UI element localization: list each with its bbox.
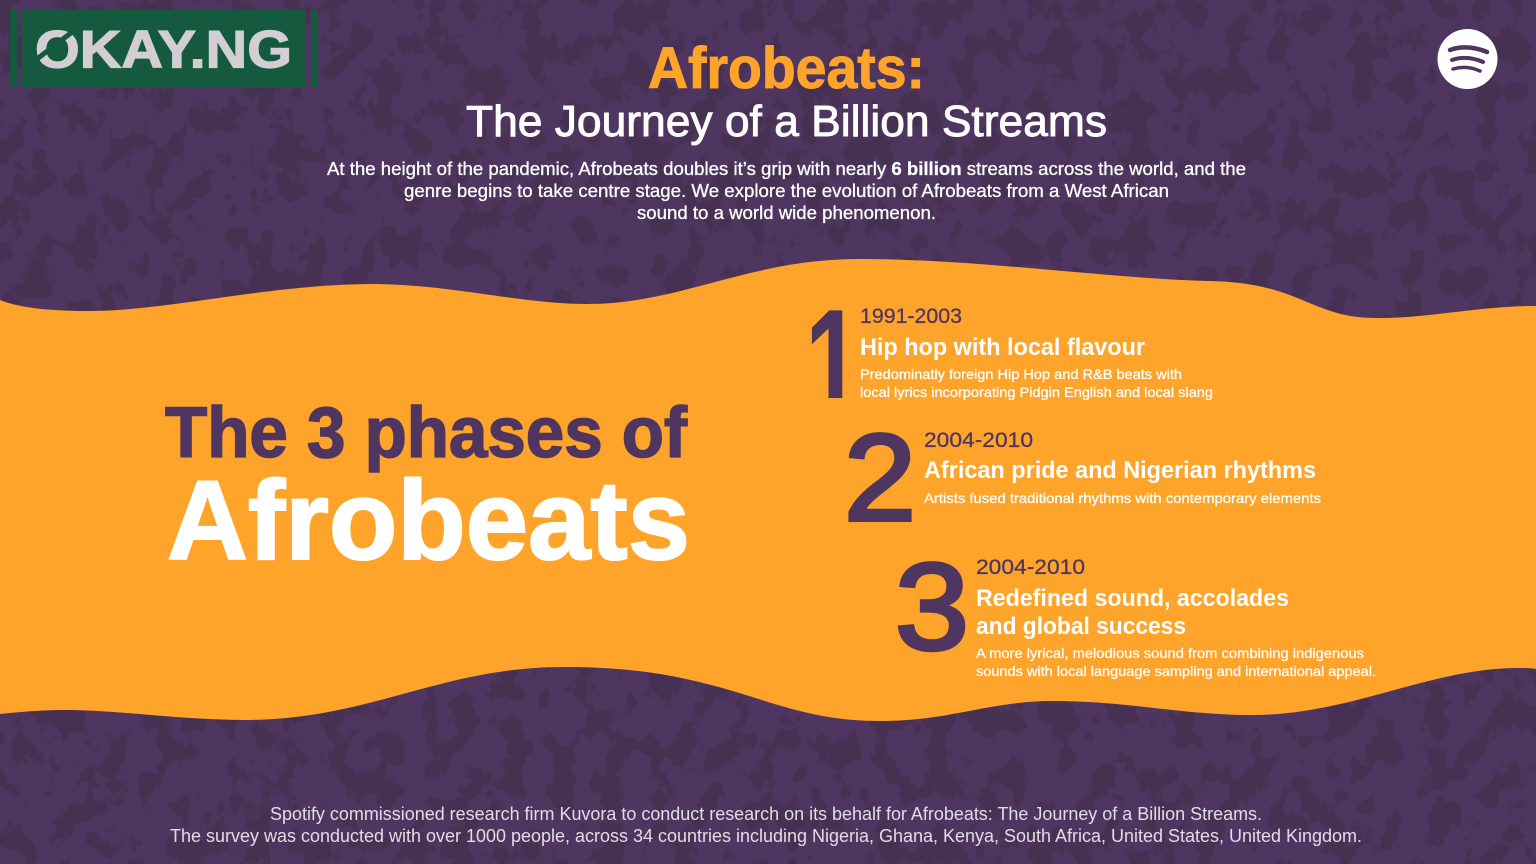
intro text: At the height of the pandemic, Afrobeats doubles it’s grip with nearly 6 billion streams across the world, and the — [327, 159, 1246, 179]
phase 3 description: sounds with local language sampling and international appeal. — [976, 663, 1376, 679]
phase 3 years: 2004-2010 — [976, 555, 1085, 579]
phase 1 — [812, 308, 1212, 400]
intro text: sound to a world wide phenomenon. — [637, 203, 936, 223]
phase 1 description: Predominatly foreign Hip Hop and R&B beats with — [860, 366, 1182, 382]
footer note — [170, 804, 1362, 846]
phase 1 description — [860, 366, 1213, 400]
logo: OKAY.NG: OKAY.NG — [35, 20, 292, 80]
number 3: 3 — [895, 539, 969, 676]
phase 3 heading: and global success — [976, 613, 1186, 640]
title: Afrobeats: — [648, 36, 925, 101]
phase 2 — [844, 410, 1321, 547]
logo: OKAY.NG — [10, 10, 317, 88]
icon: Spotify logo — [1438, 29, 1498, 89]
phase 3 heading: Redefined sound, accolades — [976, 585, 1289, 612]
title — [466, 36, 1107, 146]
phase 2 heading: African pride and Nigerian rhythms — [924, 457, 1316, 484]
heading: The 3 phases of Afrobeats: The 3 phases of — [165, 394, 687, 473]
footer note: The survey was conducted with over 1000 people, across 34 countries including Nigeria, Ghana, Kenya, South Africa, United States, United Kingdom. — [170, 826, 1362, 846]
phase 1 years: 1991-2003 — [860, 304, 962, 328]
heading: The 3 phases of Afrobeats: Afrobeats — [167, 458, 690, 583]
number 1: 1 — [805, 277, 861, 450]
number 2: 2 — [844, 410, 916, 547]
intro text — [327, 159, 1246, 223]
panel: orange wave band — [0, 259, 1536, 721]
phase 2 years: 2004-2010 — [924, 428, 1033, 452]
heading: The 3 phases of Afrobeats — [165, 394, 690, 583]
phase 3 heading — [976, 585, 1289, 640]
phase 2 description: Artists fused traditional rhythms with contemporary elements — [924, 490, 1321, 506]
phase 1 description: local lyrics incorporating Pidgin English and local slang — [860, 384, 1213, 400]
footer note: Spotify commissioned research firm Kuvora to conduct research on its behalf for Afrobeats: The Journey of a Billion Streams. — [270, 804, 1262, 824]
phase 3 description: A more lyrical, melodious sound from combining indigenous — [976, 645, 1364, 661]
phase 1 heading: Hip hop with local flavour — [860, 334, 1145, 361]
phase 3 description — [976, 645, 1376, 679]
intro text: genre begins to take centre stage. We explore the evolution of Afrobeats from a West African — [404, 181, 1169, 201]
phase 3 — [895, 539, 1376, 679]
title: The Journey of a Billion Streams — [466, 97, 1107, 146]
